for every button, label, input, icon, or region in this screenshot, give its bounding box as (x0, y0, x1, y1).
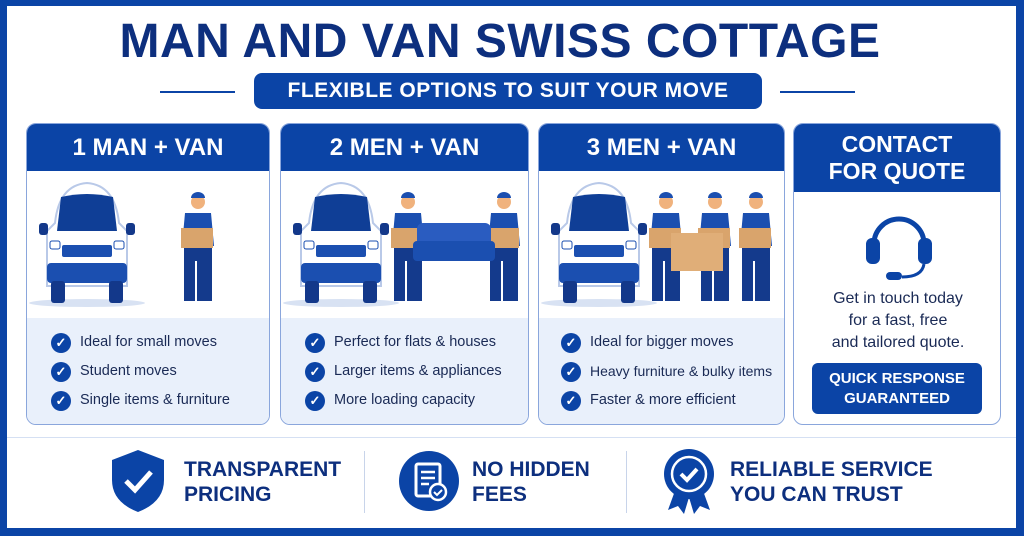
list: ✓ (310, 364, 320, 378)
feature: reliable service (664, 449, 933, 514)
list (539, 318, 784, 424)
title: MAN AND VAN SWISS COTTAGE (120, 15, 880, 68)
list: ✓ (310, 334, 320, 350)
heading (794, 124, 1000, 192)
text block: and tailored quote. (832, 334, 964, 351)
panel: 2 men + van (280, 123, 529, 425)
heading: 2 MEN + VAN (330, 134, 479, 161)
list: ✓ (310, 392, 320, 408)
list (281, 318, 528, 424)
list: ✓ (56, 392, 66, 408)
feature: no hidden fees: NO HIDDEN (472, 458, 590, 481)
text block (832, 290, 964, 351)
feature: reliable service: YOU CAN TRUST (730, 483, 903, 506)
heading: CONTACT (842, 131, 952, 157)
heading (27, 124, 269, 171)
list: Faster & more efficient (590, 392, 736, 408)
icon: van and man (29, 182, 214, 307)
list: ✓ (56, 364, 66, 378)
icon: shield (112, 450, 164, 512)
list: Heavy furniture & bulky items (590, 363, 772, 379)
icon: headset (866, 216, 932, 280)
button: QUICK RESPONSE (829, 370, 965, 387)
panel: contact for quote (793, 123, 1001, 425)
subtitle banner (254, 73, 762, 109)
list (27, 318, 269, 424)
feature: transparent pricing: PRICING (184, 483, 272, 506)
button: GUARANTEED (844, 390, 950, 407)
list: Ideal for bigger moves (590, 334, 733, 350)
list: Single items & furniture (80, 392, 230, 408)
icon: document (399, 451, 459, 511)
feature: transparent pricing: TRANSPARENT (184, 458, 341, 481)
icon: van and three men (541, 182, 772, 307)
heading: 3 MEN + VAN (587, 134, 736, 161)
text block: for a fast, free (849, 312, 947, 329)
icon: badge (664, 449, 714, 514)
subtitle banner: FLEXIBLE OPTIONS TO SUIT YOUR MOVE (288, 79, 728, 102)
list: ✓ (566, 364, 576, 378)
list: Ideal for small moves (80, 334, 217, 350)
button (812, 363, 982, 414)
list: ✓ (566, 392, 576, 408)
text block: Get in touch today (833, 290, 963, 307)
list: Perfect for flats & houses (334, 334, 496, 350)
panel: 3 men + van (538, 123, 785, 425)
feature: no hidden fees (399, 451, 590, 511)
list: More loading capacity (334, 392, 475, 408)
feature: transparent pricing (112, 450, 341, 512)
heading: FOR QUOTE (829, 158, 965, 184)
heading (539, 124, 784, 171)
feature: no hidden fees: FEES (472, 483, 527, 506)
list: ✓ (56, 334, 66, 350)
list: Student moves (80, 363, 177, 379)
icon: van, two men and sofa (283, 182, 520, 307)
panel: 1 man + van (26, 123, 270, 425)
list: ✓ (566, 334, 576, 350)
heading: 1 MAN + VAN (73, 134, 223, 161)
heading (281, 124, 528, 171)
list: Larger items & appliances (334, 363, 502, 379)
feature: reliable service: RELIABLE SERVICE (730, 458, 933, 481)
